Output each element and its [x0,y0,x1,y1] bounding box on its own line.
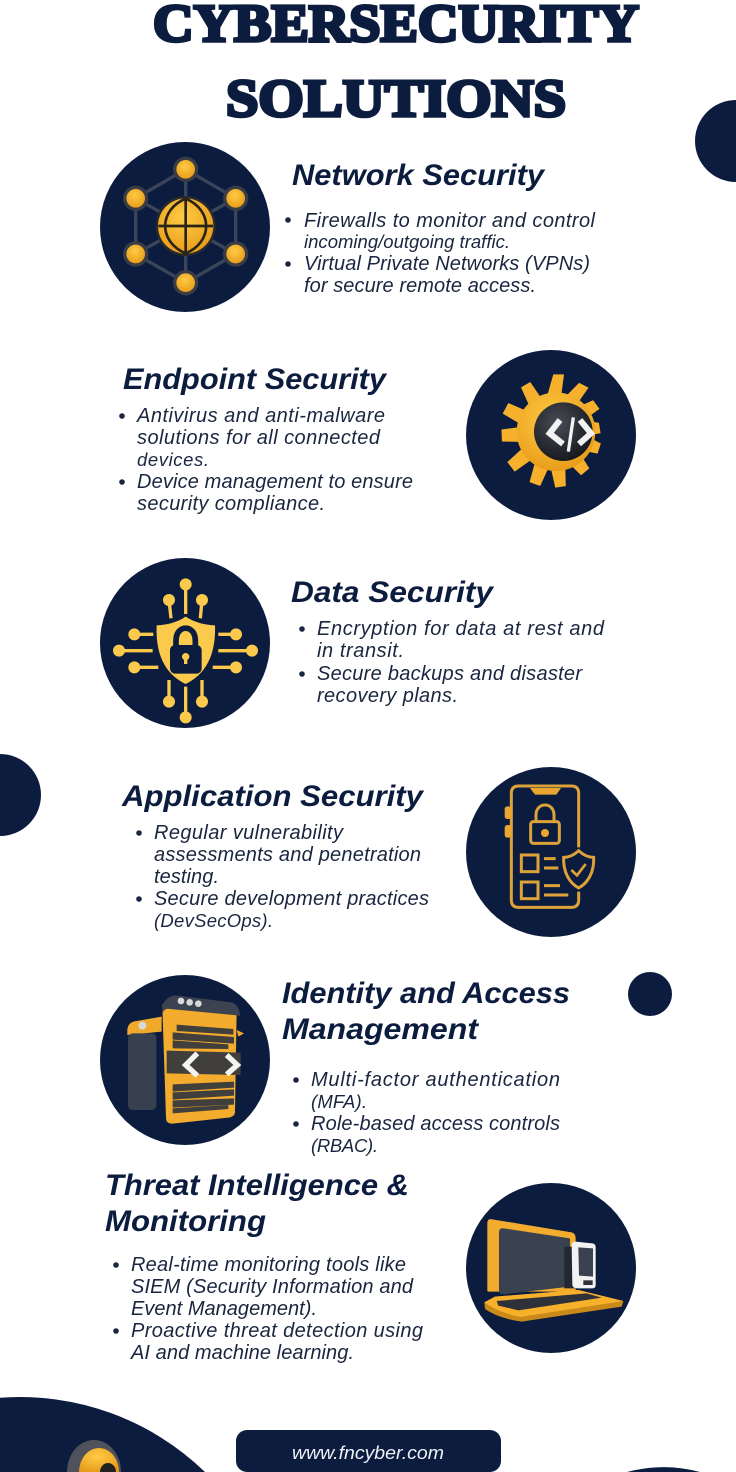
decorative circle: bottom right [627,1467,700,1472]
heading: threat intelligence and monitoring: Monitoring [105,1205,266,1238]
bullet list: threat intelligence and monitoring: Real-time monitoring tools like [131,1254,406,1276]
bullet list: application security: testing. [154,866,219,888]
bullet list: application security: Secure development practices [154,888,429,910]
bullet list: data security: recovery plans. [317,685,458,707]
panel: application security [121,767,636,937]
bullet list: identity and access management: Multi-factor authentication [311,1069,560,1091]
decorative circle: small right [628,972,672,1016]
decorative circle: middle left [0,754,41,836]
bullet list: data security: Secure backups and disaster [317,663,583,685]
heading: threat intelligence and monitoring [105,1169,409,1238]
bullet list: endpoint security: Antivirus and anti-malware [136,405,385,427]
heading: endpoint security: Endpoint Security [123,363,387,396]
decorative circle: bottom left [0,1397,205,1472]
bullet list: threat intelligence and monitoring: Proactive threat detection using [131,1320,423,1342]
panel: endpoint security [119,350,636,520]
bullet list: network security [285,210,596,297]
bullet list: application security [136,822,429,931]
decorative circle: top right [695,100,736,182]
icon: partial bottom-left emblem [67,1440,121,1472]
bullet list: application security: Regular vulnerability [154,822,344,844]
bullet list: endpoint security [119,405,413,515]
icon: network globe [100,142,270,312]
heading: network security: Network Security [292,159,545,192]
bullet list: endpoint security: security compliance. [137,493,325,515]
title: SOLUTIONS [226,70,566,128]
bullet list: data security: Encryption for data at rest and [317,618,605,640]
bullet list: identity and access management: Role-based access controls [311,1113,560,1135]
bullet list: data security [299,618,605,707]
heading: application security: Application Security [121,780,424,813]
bullet list: threat intelligence and monitoring: Event Management). [131,1298,317,1320]
website button: www.fncyber.com [292,1443,444,1463]
bullet list: network security: Virtual Private Networks (VPNs) [304,253,590,275]
website button [236,1430,501,1472]
bullet list: threat intelligence and monitoring: AI and machine learning. [130,1342,354,1364]
panel: network security [100,142,596,312]
bullet list: network security: Firewalls to monitor and control [304,210,596,232]
bullet list: identity and access management: (RBAC). [311,1135,378,1156]
icon: browser windows with arrows [100,975,270,1145]
title [153,0,639,128]
bullet list: identity and access management [293,1069,560,1156]
heading: identity and access management: Management [282,1013,480,1046]
bullet list: network security: incoming/outgoing traffic. [304,231,510,252]
panel: threat intelligence and monitoring [105,1169,636,1364]
bullet list: endpoint security: Device management to ensure [137,471,413,493]
bullet list: network security: for secure remote access. [304,275,536,297]
icon: laptop and phone [466,1183,636,1353]
panel: data security [100,558,605,728]
bullet list: identity and access management: (MFA). [311,1091,367,1112]
bullet list: application security: (DevSecOps). [154,910,273,931]
heading: identity and access management [282,977,570,1046]
icon: phone with lock and shield [466,767,636,937]
bullet list: threat intelligence and monitoring [113,1254,423,1364]
bullet list: application security: assessments and penetration [154,844,421,866]
heading: data security: Data Security [291,576,494,609]
bullet list: threat intelligence and monitoring: SIEM (Security Information and [131,1276,414,1298]
panel: identity and access management [100,975,570,1156]
heading: identity and access management: Identity and Access [282,977,570,1010]
bullet list: data security: in transit. [317,640,404,662]
bullet list: endpoint security: devices. [137,449,209,470]
heading: threat intelligence and monitoring: Threat Intelligence & [105,1169,409,1202]
bullet list: endpoint security: solutions for all connected [137,427,381,449]
icon: shield padlock circuit [100,558,270,728]
icon: gear with code symbol [466,350,636,520]
